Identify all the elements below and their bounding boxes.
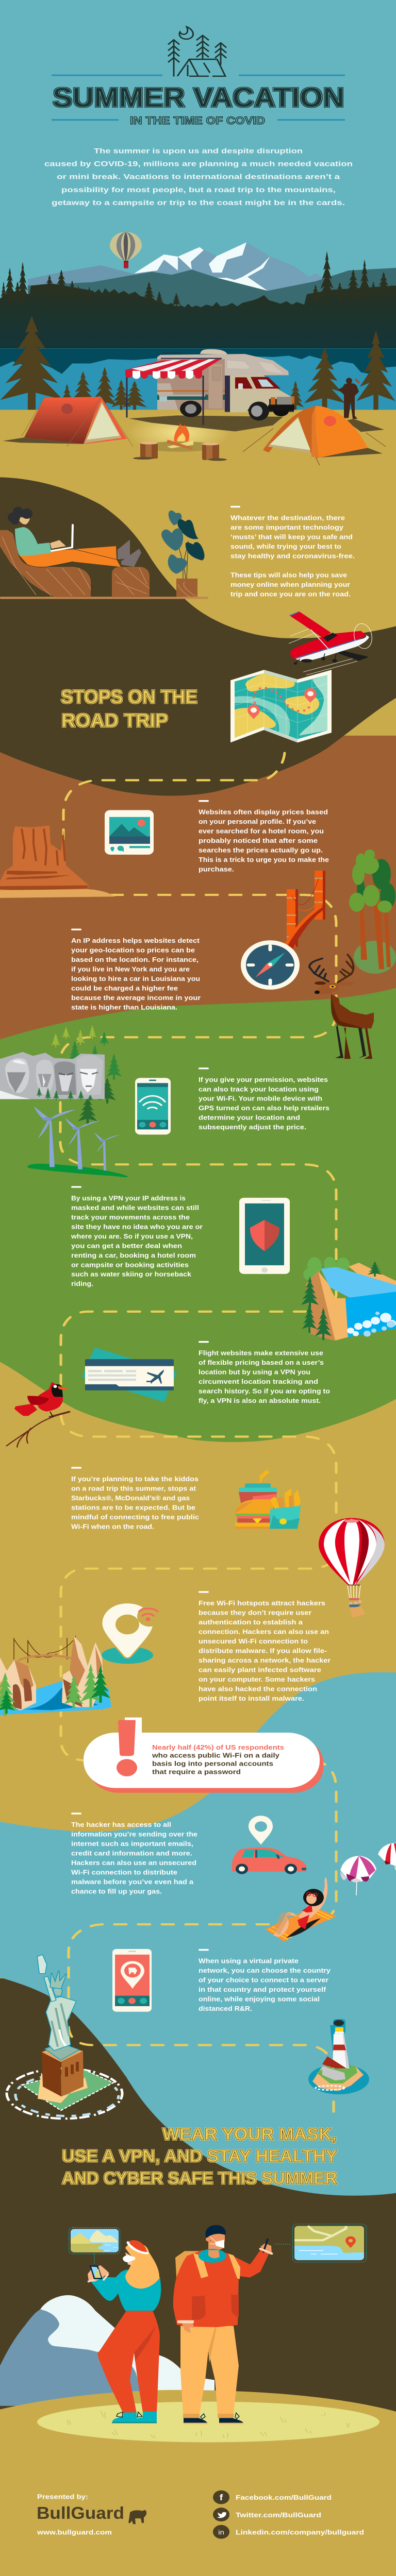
text block: vpn server: network, you can choose the country: [199, 1967, 331, 1974]
callout: 42% statistic: [84, 1718, 323, 1793]
footer: social links: Linkedin.com/company/bullguard: [236, 2529, 364, 2536]
tent: red: [3, 397, 133, 447]
text block: tech musts: money online when planning your: [230, 581, 351, 588]
footer: social links: Facebook.com/BullGuard: [236, 2494, 332, 2501]
icon: phone with shield: [239, 1198, 290, 1274]
illustration: red plane: [289, 612, 374, 675]
illustration: map: [230, 670, 332, 742]
background: campsite ground: [0, 410, 396, 756]
text block: VPN masks IP: [71, 1186, 203, 1287]
text block: hotspots: unsecured Wi-Fi connection to: [199, 1637, 308, 1645]
text block: hacker access: [71, 1812, 197, 1895]
text block: flight websites: location but by using a VPN you: [199, 1368, 310, 1376]
text block: VPN masks IP: track your movements across the: [71, 1213, 190, 1221]
illustration: waterfall: [301, 1257, 396, 1341]
text block: tech musts: [230, 506, 355, 598]
illustration: dark forest: [0, 251, 396, 349]
text block: VPN masks IP: or campsite or booking activities: [71, 1261, 189, 1268]
heading: stops on the road trip: [61, 686, 197, 731]
illustration: redwood trees: [349, 850, 396, 974]
text block: VPN masks IP: you can get a better deal when: [71, 1242, 182, 1249]
closing heading: [62, 2124, 337, 2188]
icon: phone with bulldog pin: [112, 1949, 152, 2012]
callout: 42% statistic: who access public Wi-Fi on a daily: [152, 1752, 279, 1759]
balloon small: [110, 232, 142, 268]
footer: social links: in: [218, 2529, 224, 2536]
text block: hotspots: because they don’t require user: [199, 1609, 312, 1616]
text block: hacker access: Wi-Fi connection to distribute: [71, 1869, 177, 1876]
text block: VPN masks IP: site they have no idea who you are or: [71, 1223, 203, 1230]
vehicle shadow: [129, 415, 283, 431]
text block: VPN masks IP: masked and while websites can still: [71, 1204, 199, 1211]
exclamation mark: [117, 1718, 142, 1776]
hiker silhouette: [338, 378, 384, 432]
awning: [125, 358, 222, 425]
text block: hotspots: point itself to install malware.: [199, 1694, 304, 1702]
footer: presented by: www.bullguard.com: [37, 2529, 112, 2536]
background: dark hill: [0, 477, 396, 796]
text block: tech musts: sound, while trying your best to: [230, 543, 341, 550]
text block: kids stops: on a road trip this summer, stops at: [71, 1485, 196, 1492]
subtitle: IN THE TIME OF COVID: [130, 114, 265, 127]
text block: flight websites: of flexible pricing based on a user’s: [199, 1359, 324, 1366]
illustration: lighthouse island: [308, 2019, 369, 2094]
text block: IP address: could be charged a higher fee: [71, 985, 178, 992]
text block: wi-fi location: subsequently adjust the price.: [199, 1123, 306, 1131]
illustration: wind turbines: [27, 1107, 128, 1177]
closing heading: WEAR YOUR MASK,: [162, 2124, 337, 2144]
text block: kids stops: [71, 1467, 199, 1530]
text block: kids stops: Starbucks®, McDonald’s® and gas: [71, 1494, 190, 1502]
callout: 42% statistic: basis log into personal accounts: [152, 1760, 273, 1767]
footer: social links: [213, 2490, 364, 2539]
heading: stops on the road trip: ROAD TRIP: [61, 709, 168, 731]
text block: hotspots: distribute malware. If you allow file-: [199, 1647, 327, 1654]
text block: VPN masks IP: such as water skiing or horseback: [71, 1270, 191, 1278]
closing heading: USE A VPN, AND STAY HEALTHY: [62, 2146, 337, 2165]
screen: map bubble: [275, 2224, 366, 2262]
background: dark lower band: [0, 1978, 396, 2429]
text block: vpn server: [199, 1949, 331, 2012]
intro text: caused by COVID-19, millions are planning a much needed vacation: [44, 160, 353, 168]
icon: boarding pass: [82, 1347, 177, 1402]
logo: BullGuard: BullGuard: [37, 2503, 124, 2522]
text block: vpn server: in that country and protect yourself: [199, 1986, 326, 1993]
text block: wi-fi location: can also track your location using: [199, 1085, 319, 1093]
illustration: pine cluster: [51, 1025, 122, 1125]
text block: IP address: state is higher than Louisiana.: [71, 1004, 177, 1011]
illustration: mount rushmore: [0, 1052, 105, 1101]
icon: fast food: [235, 1467, 301, 1529]
illustration: statue of liberty: [7, 1955, 122, 2119]
campfire: [133, 423, 227, 461]
text block: hotspots: connection. Hackers can also use an: [199, 1628, 329, 1635]
illustration: snowy hill: [0, 2295, 214, 2406]
text block: hotspots: Free Wi-Fi hotspots attract hackers: [199, 1599, 325, 1607]
background: teal band: [0, 1672, 396, 2196]
text block: wi-fi location: [199, 1067, 329, 1131]
text block: kids stops: Wi-Fi when on the road.: [71, 1523, 154, 1530]
icon: camp logo: [168, 27, 226, 77]
text block: VPN masks IP: By using a VPN your IP address is: [71, 1194, 186, 1202]
background: green band: [0, 988, 396, 1442]
illustration: woman with phone: [88, 2240, 161, 2424]
text block: tech musts: stay healthy and coronavirus-free.: [230, 552, 355, 560]
illustration: desert butte: [0, 826, 116, 898]
text block: flight websites: fly, a VPN is also an absolute must.: [199, 1397, 321, 1404]
intro text: or mini break. Vacations to international destinations aren’t a: [57, 173, 340, 181]
text block: kids stops: If you’re planning to take the kiddos: [71, 1475, 199, 1483]
illustration: person with laptop: [0, 507, 208, 599]
illustration: woman sunbathing: [265, 1877, 337, 1942]
text block: flight websites: [199, 1341, 330, 1404]
text block: wi-fi location: GPS turned on can also help retailers: [199, 1104, 329, 1112]
foreground ground: [0, 2390, 396, 2576]
motorhome: [157, 349, 294, 420]
text block: flight websites: circumvent location tracking and: [199, 1378, 318, 1385]
text block: prices based on profile: Websites often display prices based: [199, 808, 328, 816]
closing heading: AND CYBER SAFE THIS SUMMER: [62, 2168, 337, 2188]
text block: prices based on profile: searches the prices actually go up.: [199, 846, 323, 854]
text block: tech musts: ‘musts’ that will keep you safe and: [230, 533, 353, 540]
icon: photo post card: [105, 810, 154, 855]
text block: hotspots: [199, 1591, 331, 1702]
heading: stops on the road trip: STOPS ON THE: [61, 686, 197, 707]
text block: IP address: looking to hire a car in Louisiana you: [71, 975, 200, 982]
text block: IP address: your geo-location so prices can be: [71, 946, 195, 954]
foreground trees: [1, 316, 395, 412]
illustration: cardinal on a branch: [6, 1382, 70, 1448]
title rule lines: [52, 74, 345, 121]
text block: wi-fi location: your Wi-Fi. Your mobile device with: [199, 1095, 322, 1102]
text block: hotspots: sharing across a network, the hacker: [199, 1656, 331, 1664]
text block: vpn server: When using a virtual private: [199, 1957, 299, 1964]
text block: IP address: if you live in New York and you are: [71, 965, 190, 973]
text block: wi-fi location: If you give your permission, websites: [199, 1076, 328, 1083]
text block: tech musts: trip and once you are on the road.: [230, 590, 351, 598]
campfire glow: [128, 413, 231, 452]
lake: [0, 348, 396, 412]
illustration: man with phone: [173, 2225, 272, 2424]
text block: kids stops: stations are to be expected. But be: [71, 1504, 195, 1511]
text block: hacker access: information you’re sending over the: [71, 1831, 197, 1838]
footer: presented by: Presented by:: [37, 2493, 88, 2500]
illustration: mountain landscape: [28, 242, 396, 316]
icon: compass: [241, 940, 300, 990]
text block: kids stops: mindful of connecting to free public: [71, 1513, 199, 1521]
text block: hacker access: The hacker has access to all: [71, 1821, 171, 1828]
text block: prices based on profile: purchase.: [199, 866, 234, 873]
background: sky: [0, 0, 396, 411]
title: SUMMER VACATION: [53, 82, 344, 113]
intro text: possibility for most people, but a road trip to the mountains,: [61, 186, 336, 194]
text block: prices based on profile: [199, 800, 329, 873]
illustration: hot air balloon: [319, 1518, 385, 1618]
background: brown band: [0, 736, 396, 1047]
text block: hacker access: malware before you’ve even had a: [71, 1878, 193, 1886]
footer: presented by: [37, 2493, 146, 2536]
text block: vpn server: online, while enjoying some social: [199, 1995, 320, 2003]
text block: flight websites: Flight websites make extensive use: [199, 1349, 323, 1357]
text block: hacker access: credit card information and more.: [71, 1850, 192, 1857]
ground edge: [0, 410, 396, 453]
text block: tech musts: Whatever the destination, there: [230, 514, 345, 521]
illustration: golden gate bridge: [281, 871, 325, 954]
illustration: deer: [309, 955, 374, 1059]
icon: phone with wi-fi: [135, 1078, 171, 1134]
text block: hacker access: internet such as important emails,: [71, 1840, 193, 1848]
text block: hotspots: have also hacked the connection: [199, 1685, 317, 1692]
tent: orange: [243, 406, 386, 465]
text block: vpn server: of your choice to connect to a server: [199, 1976, 329, 1984]
text block: IP address: because the average income in your: [71, 994, 201, 1002]
text block: prices based on profile: probably noticed that after some: [199, 837, 318, 844]
text block: tech musts: These tips will also help you save: [230, 571, 347, 579]
intro text: The summer is upon us and despite disruption: [94, 147, 303, 155]
text block: hacker access: Hackers can also use an unsecured: [71, 1859, 196, 1867]
illustration: canyon with rope bridge: [0, 1636, 111, 1716]
text block: IP address: An IP address helps websites detect: [71, 937, 200, 944]
text block: IP address: [71, 928, 201, 1011]
text block: VPN masks IP: where you are. So if you use a VPN,: [71, 1232, 193, 1240]
screen: landscape photo bubble: [69, 2227, 120, 2264]
text block: flight websites: search history. So if you are opting to: [199, 1387, 330, 1395]
road: dashed route: [60, 753, 336, 2115]
icon: pin over car: [232, 1816, 306, 1874]
illustration: beach umbrellas: [340, 1843, 396, 1895]
icon: location pin with wi-fi: [102, 1603, 162, 1664]
footer: social links: Twitter.com/BullGuard: [236, 2511, 321, 2519]
text block: prices based on profile: ever searched for a hotel room, you: [199, 827, 324, 835]
text block: hacker access: chance to fill up your gas.: [71, 1888, 162, 1895]
text block: VPN masks IP: riding.: [71, 1280, 93, 1287]
intro text: getaway to a campsite or trip to the coast might be in the cards.: [52, 199, 345, 207]
text block: hotspots: can easily plant infected software: [199, 1666, 321, 1673]
text block: hotspots: authentication to establish a: [199, 1618, 303, 1626]
text block: IP address: based on the location. For instance,: [71, 956, 199, 963]
ground ellipse with grass: [37, 2402, 380, 2442]
footer: social links: f: [220, 2493, 223, 2502]
text block: VPN masks IP: renting a car, booking a hotel room: [71, 1251, 196, 1259]
text block: hotspots: on your computer. Some hackers: [199, 1675, 315, 1683]
text block: prices based on profile: This is a trick to urge you to make the: [199, 856, 329, 863]
callout: 42% statistic: that require a password: [152, 1768, 241, 1775]
text block: tech musts: are some important technology: [230, 523, 343, 531]
intro text: [44, 147, 353, 207]
callout: 42% statistic: Nearly half (42%) of US respondents: [152, 1743, 284, 1751]
text block: vpn server: distanced R&R.: [199, 2005, 252, 2012]
text block: wi-fi location: determine your location and: [199, 1114, 300, 1121]
text block: prices based on profile: on your personal profile. If you’ve: [199, 818, 316, 825]
plant: [161, 511, 204, 597]
